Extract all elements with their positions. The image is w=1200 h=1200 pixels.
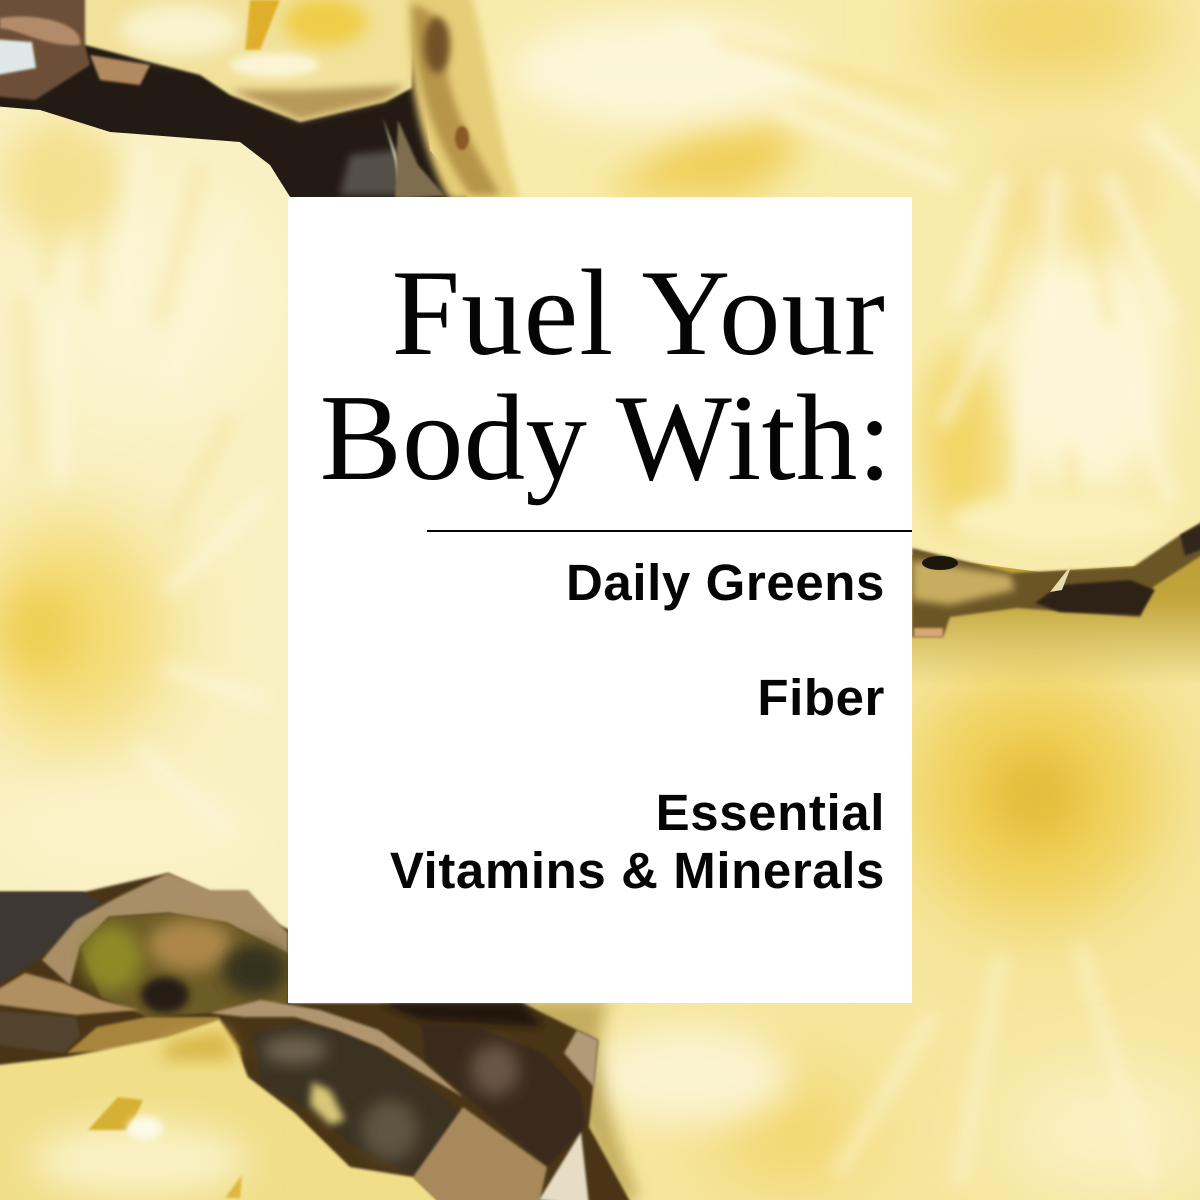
list item: Fiber: Fiber xyxy=(757,669,885,726)
title line: Body With:: Body With: xyxy=(320,369,892,506)
list item: Essential Vitamins & Minerals xyxy=(390,784,885,899)
list item: Essential Vitamins & Minerals: Essential xyxy=(656,784,885,841)
divider rule xyxy=(427,530,912,532)
list item: Daily Greens: Daily Greens xyxy=(566,554,885,611)
top-right slice flesh xyxy=(408,0,1200,572)
title line: Fuel Your: Fuel Your xyxy=(392,244,886,381)
top-right slice rind edge xyxy=(395,0,520,200)
left slice flesh xyxy=(0,106,290,929)
bottom-right slice flesh xyxy=(420,530,1200,1200)
bottom-left slice flesh xyxy=(0,1020,442,1200)
bottom-left rind xyxy=(0,873,632,1200)
right rind xyxy=(912,520,1200,637)
white text panel xyxy=(288,197,912,1003)
top-left slice and dark gap xyxy=(0,0,470,200)
list item: Essential Vitamins & Minerals: Vitamins & Minerals xyxy=(390,842,885,899)
